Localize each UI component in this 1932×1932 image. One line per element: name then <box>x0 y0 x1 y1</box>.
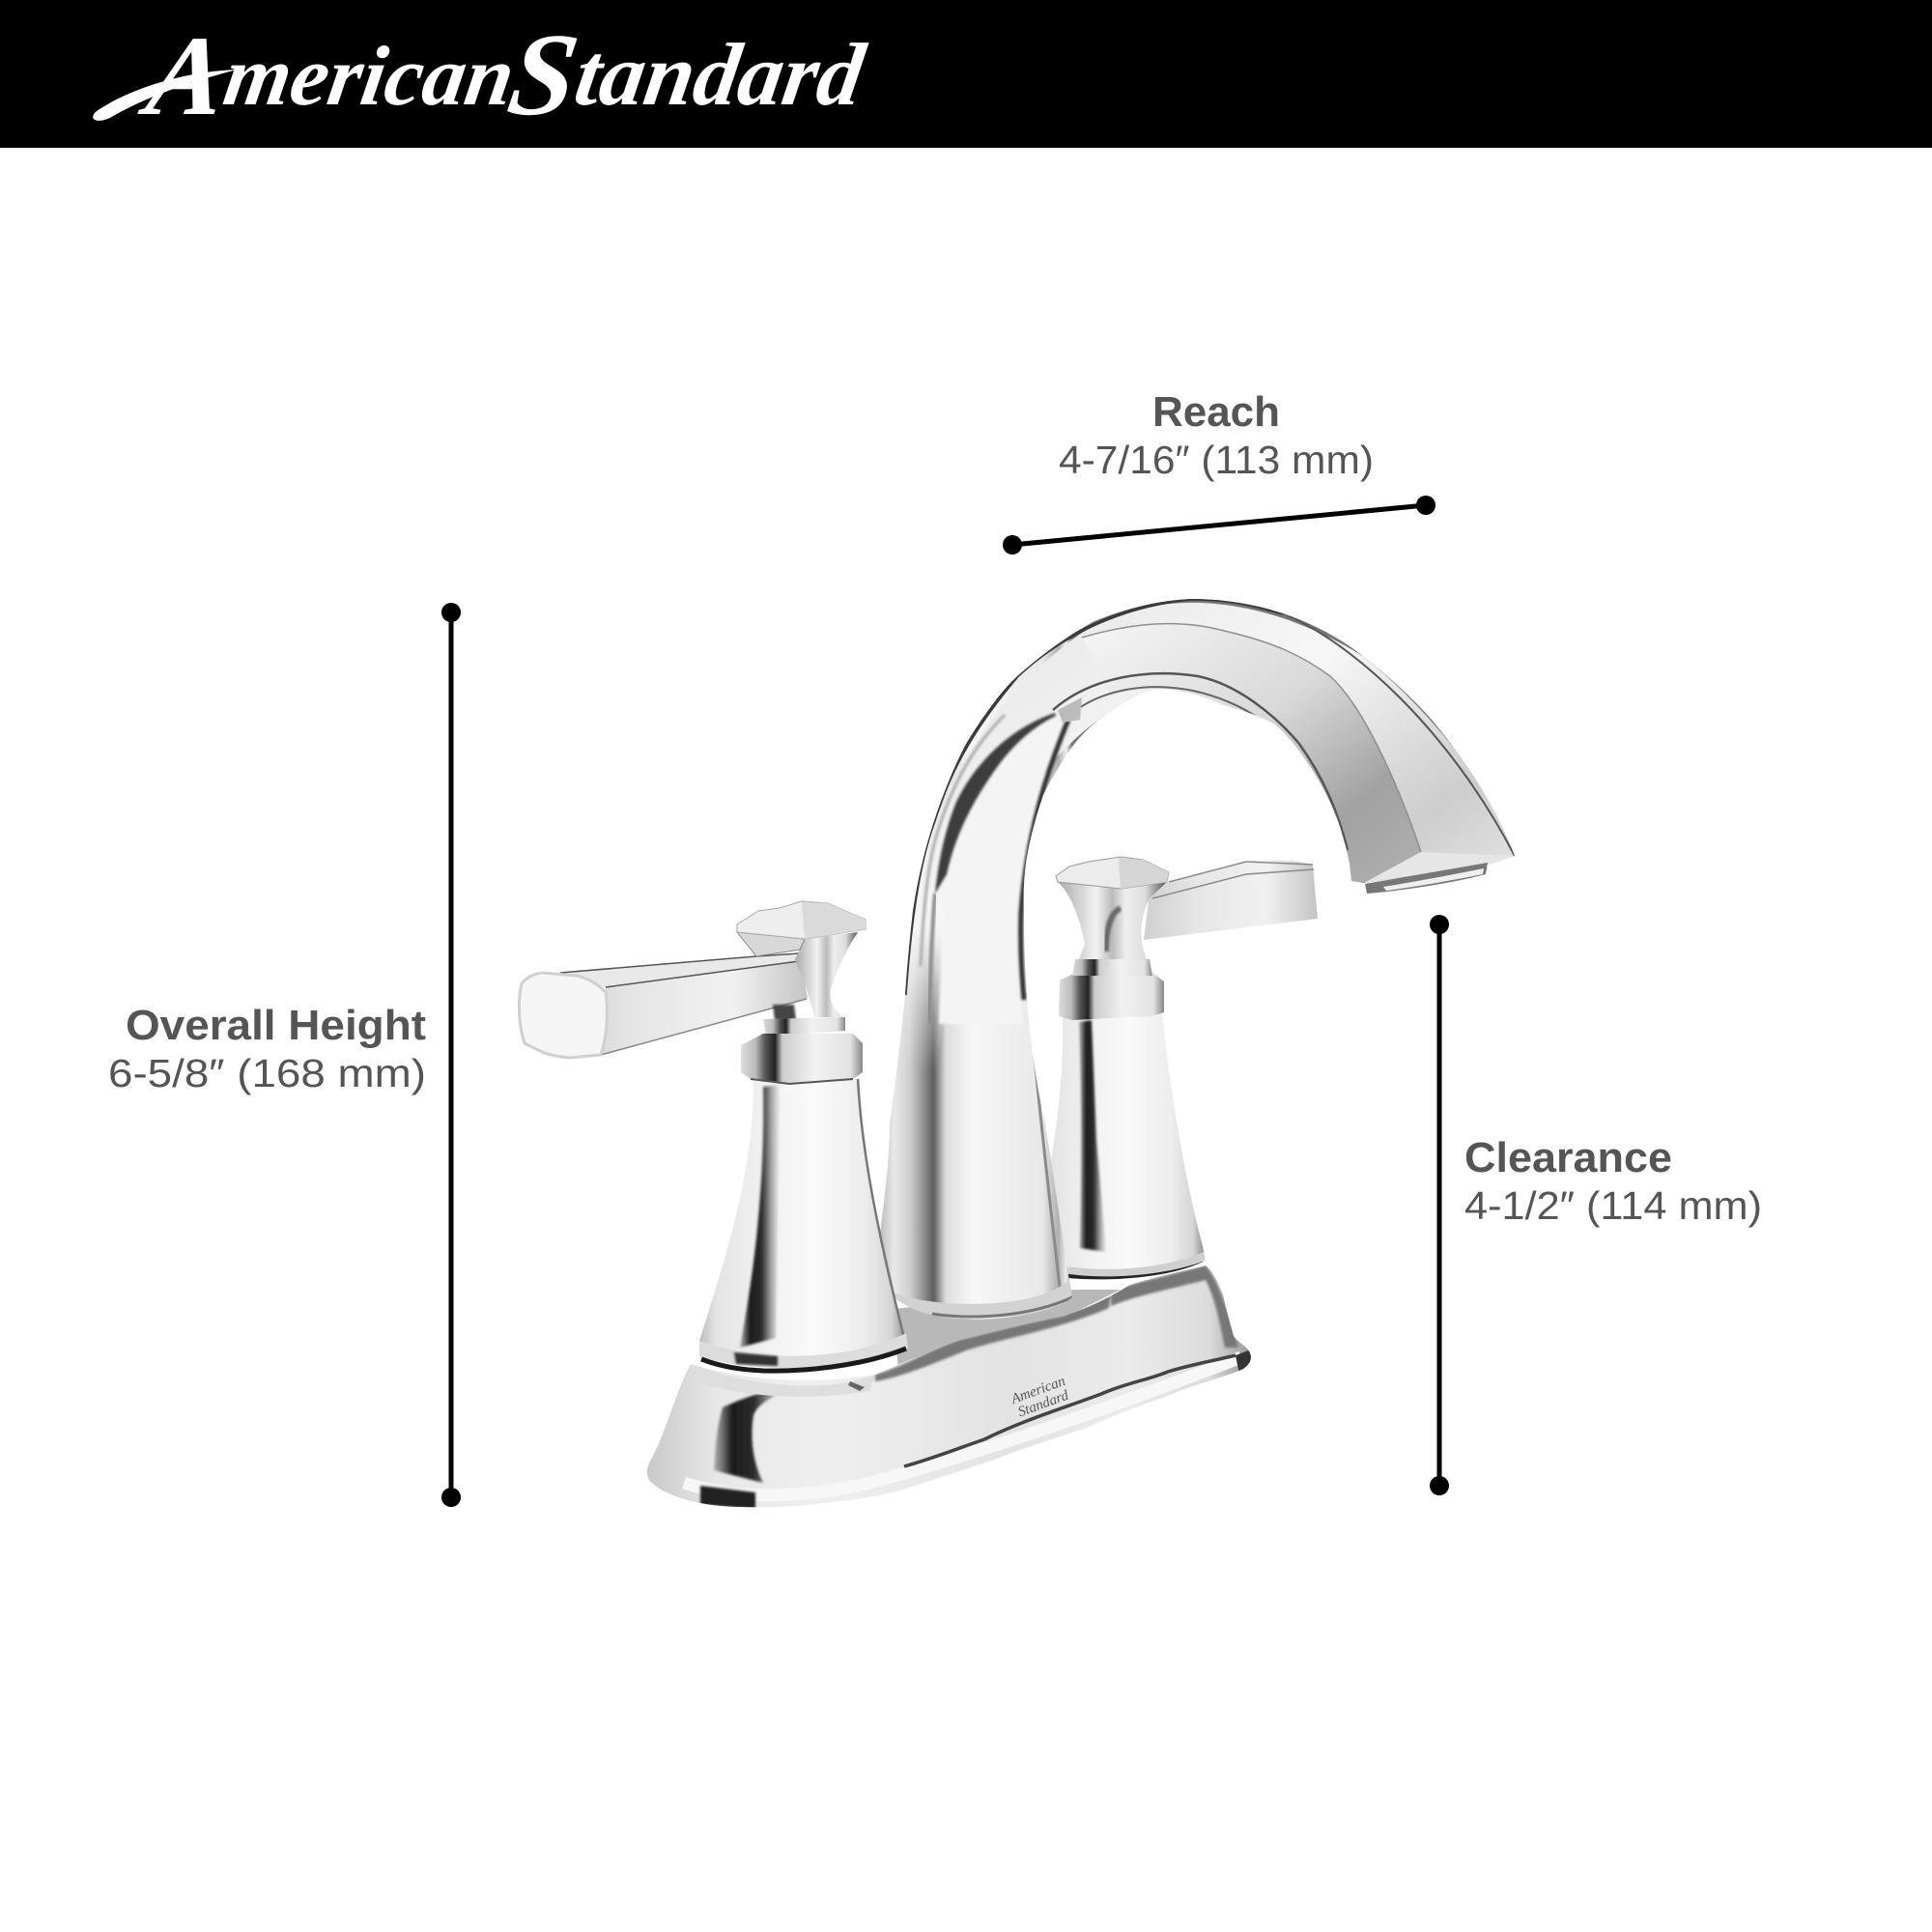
left body cone <box>699 1079 906 1366</box>
dimension: overall height <box>108 603 461 1507</box>
brand logo: A <box>132 13 236 139</box>
left collar <box>773 1005 796 1020</box>
clearance label <box>1464 1134 1762 1228</box>
right body cone <box>1038 1010 1205 1275</box>
dimension: clearance <box>1430 915 1762 1495</box>
right cap <box>1056 857 1169 889</box>
right stem <box>1058 882 1167 959</box>
clearance measure line <box>1430 915 1449 1495</box>
small base logo: Standard <box>1016 1387 1071 1420</box>
neck dark reflection <box>935 713 1056 894</box>
dimension: reach <box>1003 388 1435 554</box>
arch top surface <box>894 603 1521 1072</box>
arch underside detail <box>1053 673 1348 850</box>
neck tongue highlight <box>937 768 1047 1026</box>
reach label <box>1059 388 1374 482</box>
arch side facet <box>1082 624 1421 883</box>
overall height label: Overall Height <box>126 1002 426 1049</box>
right handle <box>1038 857 1318 1277</box>
chrome behind spout base <box>894 1290 1121 1372</box>
left lever <box>560 953 808 1055</box>
small base logo: American <box>1009 1374 1067 1407</box>
outer edge line <box>905 599 1283 995</box>
aerator <box>1365 863 1488 894</box>
left stem <box>795 932 858 1017</box>
deck plate <box>647 1265 1254 1509</box>
brand logo: S <box>500 10 586 140</box>
small base logo <box>1009 1374 1072 1421</box>
spout <box>874 599 1521 1320</box>
brand logo: tandard <box>569 27 872 125</box>
faucet illustration <box>519 599 1521 1509</box>
reach measure line <box>1003 496 1435 554</box>
overall height label: 6-5/8″ (168 mm) <box>108 1051 426 1095</box>
left handle <box>519 901 908 1371</box>
left cap <box>737 901 866 939</box>
right collar <box>1059 973 1164 1020</box>
right lever <box>1144 860 1318 940</box>
overall height measure line <box>441 603 461 1507</box>
reach label: 4-7/16″ (113 mm) <box>1059 438 1374 482</box>
overall height label <box>108 1002 426 1095</box>
clearance label: 4-1/2″ (114 mm) <box>1464 1183 1762 1228</box>
reach label: Reach <box>1152 388 1280 436</box>
header banner <box>0 0 1932 148</box>
clearance label: Clearance <box>1464 1134 1672 1181</box>
spout base ring <box>895 1280 1072 1318</box>
brand logo <box>89 10 875 140</box>
lever end cap <box>519 973 607 1058</box>
brand logo: merican <box>218 29 521 124</box>
